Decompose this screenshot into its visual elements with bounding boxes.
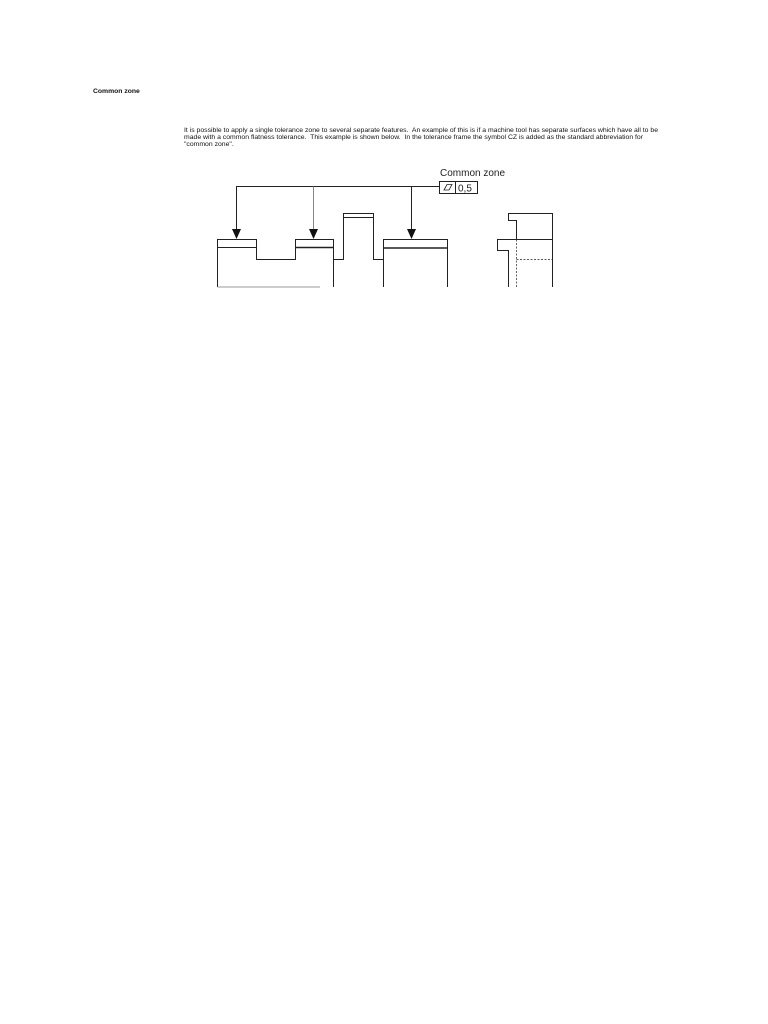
leader arrows: [232, 186, 440, 239]
heading: Common zone: [93, 88, 140, 95]
tolerance frame: 0,5: [458, 184, 472, 194]
tolerance frame: Common zone: [440, 168, 505, 179]
paragraph: [184, 127, 658, 148]
tolerance frame: [440, 168, 505, 194]
paragraph: "common zone".: [184, 141, 234, 148]
front view part: [218, 214, 448, 287]
paragraph: It is possible to apply a single tolerance zone to several separate features. An example of this is if a machine tool has separate surfaces which have all to be: [184, 127, 658, 134]
side view part: [498, 214, 552, 287]
paragraph: made with a common flatness tolerance. This example is shown below. In the tolerance frame the symbol CZ is added as the standard abbreviation for: [184, 134, 643, 141]
